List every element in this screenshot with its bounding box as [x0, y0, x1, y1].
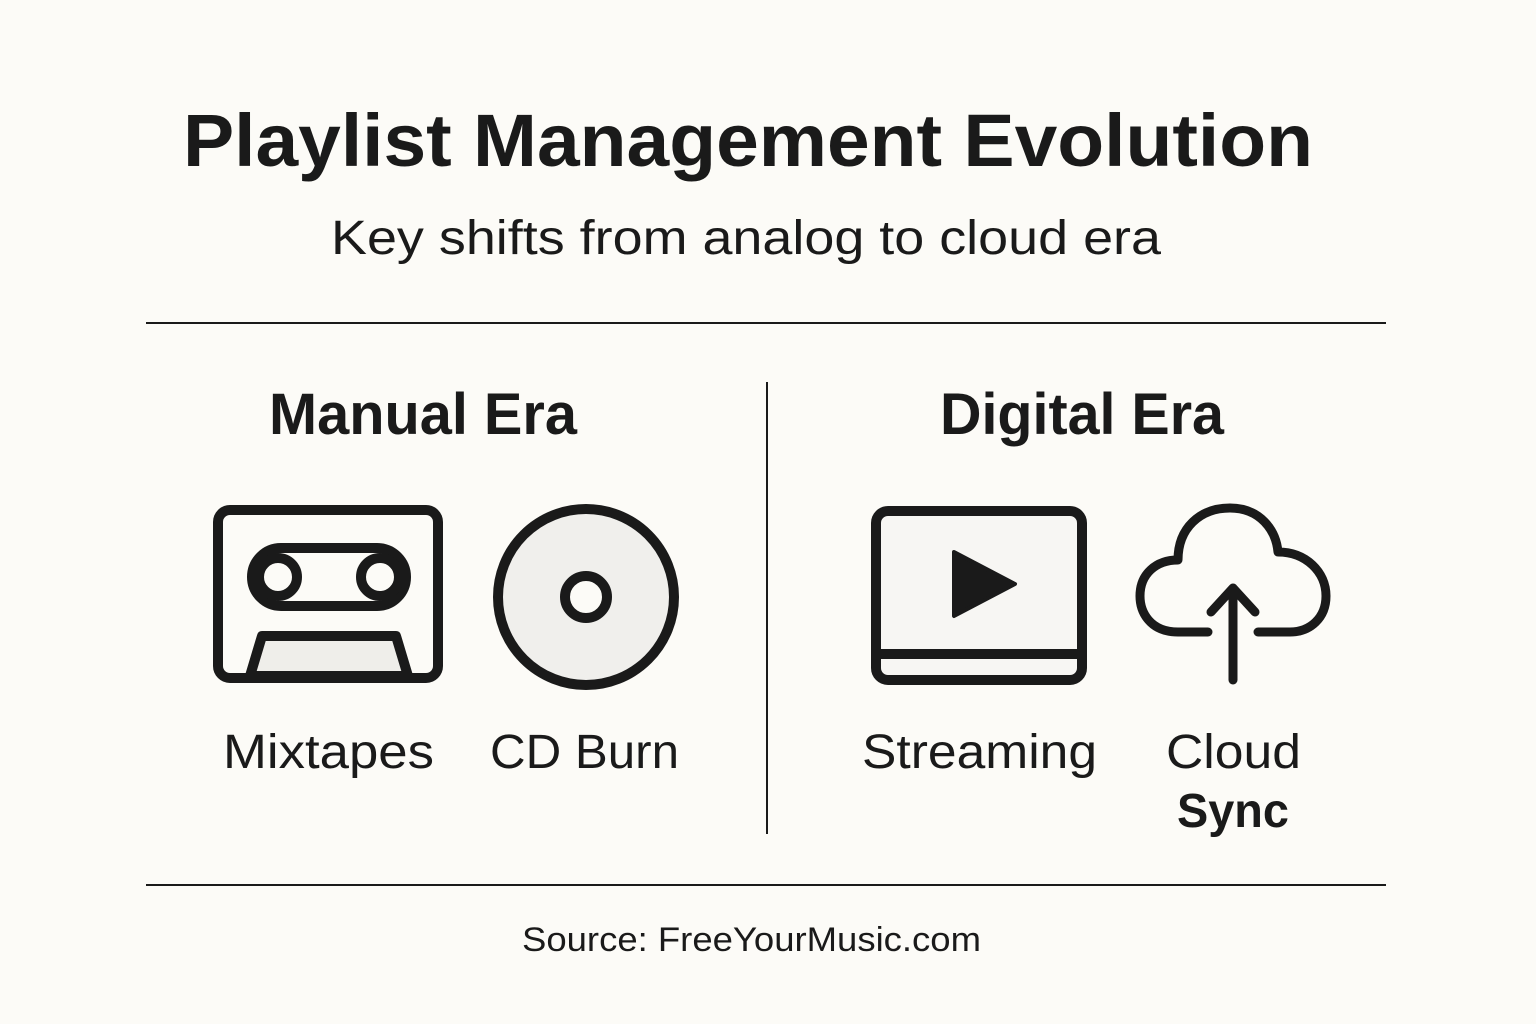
icon: cassette [218, 510, 438, 678]
label: Cloud Sync [1166, 726, 1301, 838]
source: Source: FreeYourMusic.com [522, 921, 981, 959]
icon: cd [498, 509, 674, 685]
label: Cloud Sync: Sync [1177, 785, 1289, 838]
icon: cloud upload [1140, 508, 1326, 680]
label: Cloud Sync: Cloud [1166, 726, 1301, 779]
heading: Manual Era: Manual Era [269, 382, 578, 447]
subtitle: Key shifts from analog to cloud era [331, 212, 1161, 265]
label: Streaming: Streaming [862, 726, 1097, 779]
panel: manual era [218, 382, 679, 779]
icon: streaming player [876, 511, 1082, 680]
title: Playlist Management Evolution [183, 99, 1313, 182]
panel: digital era [862, 382, 1326, 838]
heading: Digital Era: Digital Era [940, 382, 1225, 447]
label: Mixtapes: Mixtapes [223, 726, 434, 779]
label: CD Burn: CD Burn [490, 726, 679, 779]
